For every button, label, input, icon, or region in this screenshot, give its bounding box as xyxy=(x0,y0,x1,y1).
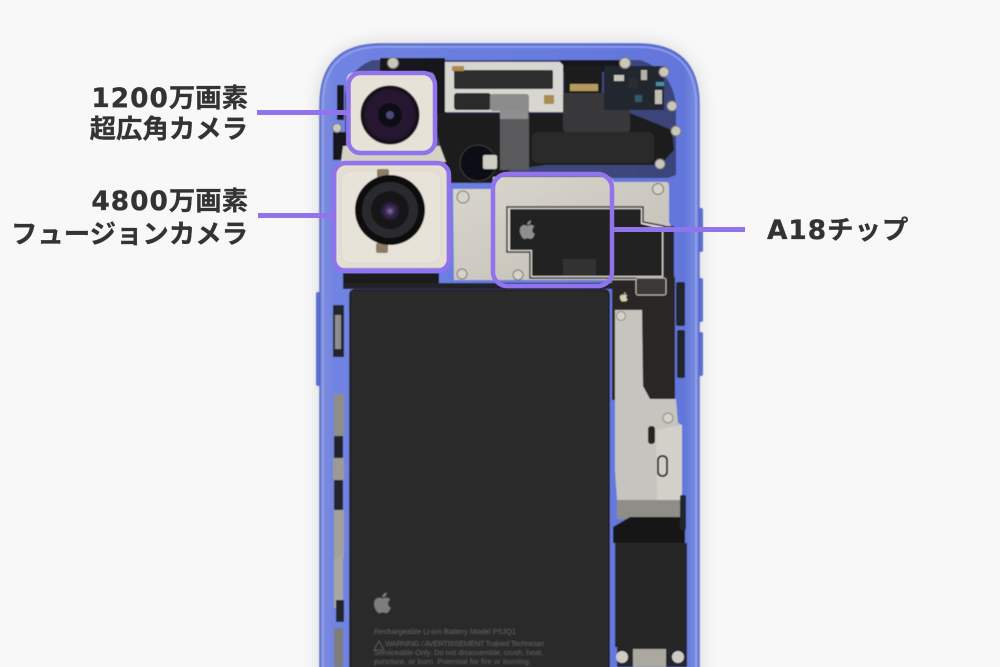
apple logo on chip xyxy=(520,220,535,239)
logic board screws xyxy=(457,184,664,280)
battery xyxy=(350,290,609,667)
leader line: fusion camera xyxy=(258,213,336,218)
band under logic board xyxy=(343,283,612,289)
chip cover outline xyxy=(507,207,664,278)
top bracket xyxy=(445,62,563,112)
lens pupil xyxy=(386,111,394,119)
battery text: Rechargeable Li-ion Battery Model P5JQ1 xyxy=(374,627,516,636)
lens glass xyxy=(371,191,409,229)
callout: fusion camera highlight xyxy=(334,163,449,271)
flex lower xyxy=(617,500,682,519)
label line two: フュージョンカメラ xyxy=(11,219,248,250)
camera plate xyxy=(347,73,435,152)
speaker pill xyxy=(532,132,654,163)
battery warning line 3: puncture, or burn. Potential for fire or burning. xyxy=(374,657,531,666)
side buttons xyxy=(316,208,703,386)
bottom bracket xyxy=(616,647,687,667)
board small chip xyxy=(636,278,666,295)
screw on acoustic circle xyxy=(483,155,497,169)
camera lower bar xyxy=(343,273,439,284)
lens mount tabs xyxy=(376,169,389,253)
top stripe dark parts xyxy=(333,58,620,160)
frame highlight xyxy=(323,47,696,667)
blue frame xyxy=(320,44,699,667)
dark cavity top xyxy=(345,60,676,178)
right edge components xyxy=(676,282,686,530)
lens centre xyxy=(378,103,402,127)
flex highlight xyxy=(500,110,528,119)
callout: A18 chip highlight xyxy=(493,174,612,286)
battery warning triangle xyxy=(374,641,384,650)
plate inset xyxy=(341,171,441,263)
right dark margin of shield xyxy=(664,226,674,282)
lens barrel xyxy=(362,182,418,238)
dark connector band xyxy=(613,517,685,543)
top assembly dark body xyxy=(436,113,674,183)
connector block xyxy=(564,66,602,94)
callout: ultra wide camera highlight xyxy=(348,73,435,153)
label line one: 4800万画素 xyxy=(91,186,248,217)
lens ring xyxy=(361,86,419,144)
flex cable xyxy=(500,110,529,170)
small apple logo xyxy=(620,292,628,302)
battery warning line 2: Serviceable Only. Do not disassemble, crush, heat, xyxy=(374,648,543,657)
camera plate xyxy=(336,165,447,268)
dark pad xyxy=(563,93,630,132)
plate screw xyxy=(663,413,673,423)
camera module base xyxy=(341,146,446,162)
phone shadow xyxy=(320,44,699,667)
leader line: A18 chip xyxy=(612,227,745,232)
leader line: ultra wide camera xyxy=(257,110,349,115)
battery body xyxy=(350,290,609,667)
label: 12MP ultra wide xyxy=(90,83,248,145)
label line one: 1200万画素 xyxy=(91,83,248,114)
logic board shield xyxy=(453,177,671,280)
lens pupil xyxy=(379,200,401,222)
label: A18 chip: A18チップ xyxy=(767,215,909,246)
chip cover xyxy=(510,209,662,276)
plate screw upper xyxy=(616,312,626,320)
battery apple logo xyxy=(374,593,391,613)
dark block speaker xyxy=(615,543,687,647)
lens outer xyxy=(355,175,425,245)
chip cover lighter patch xyxy=(563,259,596,276)
metal plate lighter section xyxy=(656,425,682,500)
phone internals photo xyxy=(316,44,703,667)
screws top xyxy=(332,58,681,169)
battery warning text: WARNING / AVERTISSEMENT Trained Technician xyxy=(385,639,544,648)
bracket dark pills xyxy=(452,66,554,111)
label: 48MP fusion xyxy=(11,186,248,250)
fusion camera xyxy=(336,165,447,268)
acoustic circle xyxy=(460,145,496,181)
lower right board xyxy=(612,277,675,400)
left edge components xyxy=(333,305,344,667)
top right circuitry xyxy=(604,66,664,110)
ultra wide camera xyxy=(347,73,435,152)
label line two: 超広角カメラ xyxy=(90,114,248,145)
metal plate lower right xyxy=(615,310,682,500)
plate slot xyxy=(648,426,667,476)
